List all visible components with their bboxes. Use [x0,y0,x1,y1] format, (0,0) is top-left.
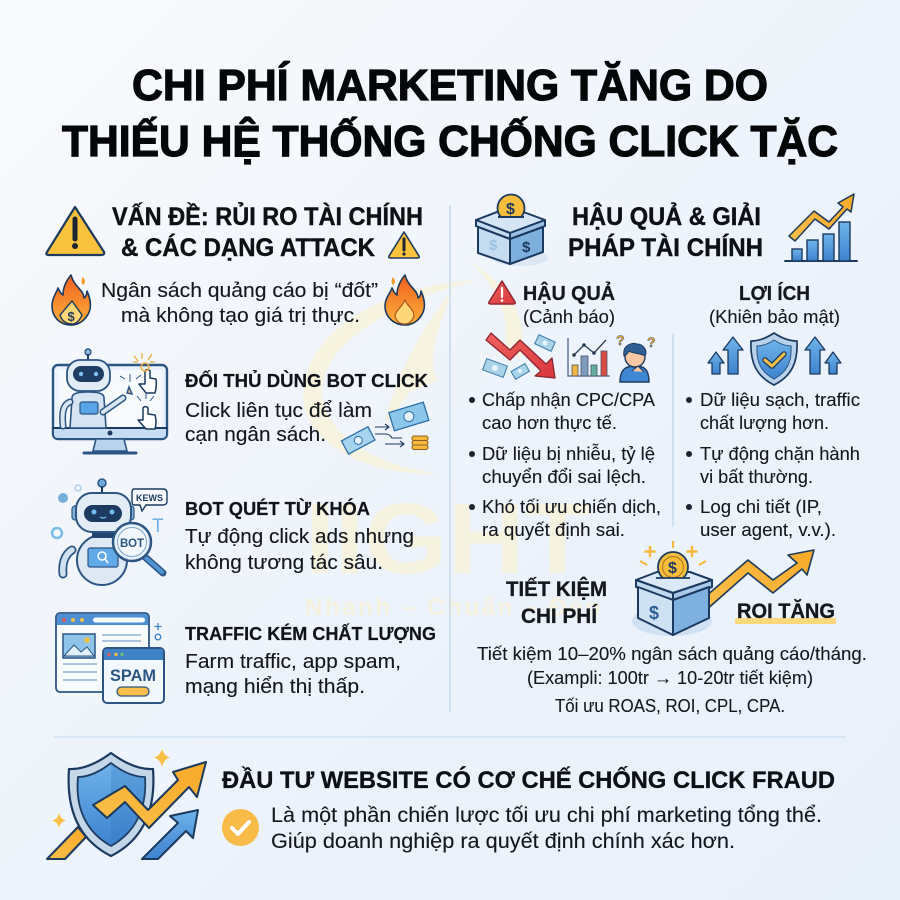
text: invest detail: Giúp doanh nghiệp ra quyết định chính xác hơn. [271,830,735,853]
icon: spam browser windows [56,613,164,703]
icon: savings box with coin: $ [489,237,498,254]
text: savings detail: (Exampli: 100tr → 10-20tr tiết kiệm) [527,667,813,688]
list: consequences: ra quyết định sai. [482,519,625,540]
icon: money draining to coins [341,402,429,454]
text: auto click ads [185,525,414,574]
text: savings detail: Tiết kiệm 10–20% ngân sách quảng cáo/tháng. [477,643,867,664]
text: auto click ads: không tương tác sâu. [185,551,383,574]
icon: savings box with coin: $ [506,201,515,218]
heading: problem: VẤN ĐỀ: RỦI RO TÀI CHÍNH [112,201,423,231]
icon: robot at monitor [53,349,167,453]
list: benefits: chất lượng hơn. [700,412,829,433]
item: keyword bots [52,479,414,585]
heading: problem: & CÁC DẠNG ATTACK [121,233,375,262]
icon: savings box with coin: $ [522,239,531,256]
text: savings detail: Tối ưu ROAS, ROI, CPL, CPA. [555,695,785,716]
heading: benefits: LỢI ÍCH [739,282,810,305]
text: invest detail: Là một phần chiến lược tối ưu chi phí marketing tổng thể. [271,804,822,827]
icon: shield with growth arrows [47,749,206,859]
list: benefits: user agent, v.v.). [700,519,836,540]
text: auto click ads: Tự động click ads nhưng [185,525,414,548]
text: click continuously: cạn ngân sách. [185,423,326,446]
item: low quality traffic [56,613,436,703]
text: click continuously: Click liên tục để làm [185,399,372,422]
heading: benefits [709,282,840,327]
icon: falling money arrow [483,333,555,379]
icon: savings box with rising arrow [632,541,814,636]
heading: consequences: HẬU QUẢ [523,281,615,305]
heading: consequences and solutions [568,201,763,262]
icon: flame with dollar: $ [68,309,76,324]
icon: savings box with rising arrow: $ [649,603,659,623]
heading: low quality traffic: TRAFFIC KÉM CHẤT LƯỢNG [185,623,436,644]
icon: savings box with rising arrow: $ [668,560,677,577]
icon: confused person: ? [647,334,656,350]
heading: cost savings: CHI PHÍ [521,605,598,628]
panel: problem and attack types [46,201,436,703]
text: budget burned [101,279,378,327]
heading: consequences: (Cảnh báo) [523,306,615,327]
panel: bottom call to action [47,749,835,859]
icon: flame [385,275,424,325]
icon: rising bar chart [785,194,857,261]
icon: savings box with coin [476,194,548,266]
list: benefits [686,389,860,540]
list: consequences: Khó tối ưu chiến dịch, [482,496,661,517]
panel: consequences and financial solutions [469,194,867,716]
icon: robot with magnifier: KEWS [136,493,163,504]
icon: check badge [222,809,259,846]
heading: benefits: (Khiên bảo mật) [709,306,840,327]
icon: red warning [489,281,515,304]
list: consequences: cao hơn thực tế. [482,412,617,433]
list: consequences: Dữ liệu bị nhiễu, tỷ lệ [482,443,655,464]
column: consequences [469,281,661,540]
icon: confused person: ? [616,332,625,348]
icon: spam browser windows: SPAM [110,666,156,685]
heading: cost savings: TIẾT KIỆM [506,577,607,601]
list: benefits: vi bất thường. [700,466,813,487]
column: benefits [686,282,860,540]
list: benefits: Tự động chặn hành [700,443,860,464]
title: THIẾU HỆ THỐNG CHỐNG CLICK TẶC [62,115,838,166]
icon: confused person [616,332,656,382]
text: farm traffic [185,650,401,698]
text: budget burned: mà không tạo giá trị thực. [121,304,360,327]
watermark logo [303,262,600,621]
text: invest detail [271,804,822,853]
icon: robot with magnifier [52,479,167,585]
title [62,60,838,166]
heading: keyword bot: BOT QUÉT TỪ KHÓA [185,498,370,519]
text: click continuously [185,399,372,446]
watermark logo: IIGHT [305,483,590,595]
text: savings detail [477,643,867,716]
heading: consequences [523,281,615,327]
text: farm traffic: Farm traffic, app spam, [185,650,401,673]
watermark logo: Nhanh – Chuẩn – Đẹp [305,594,600,621]
icon: mixed chart [568,338,610,376]
item: competitor bots [53,349,429,454]
icon: small warning triangle [389,232,419,258]
heading: consequences and solutions: PHÁP TÀI CHÍNH [568,233,763,262]
list: consequences: Chấp nhận CPC/CPA [482,389,656,410]
heading: problem [112,201,423,262]
text: farm traffic: mạng hiển thị thấp. [185,675,365,698]
heading: cost savings [506,577,607,628]
icon: robot with magnifier: T [152,516,164,537]
text: budget burned: Ngân sách quảng cáo bị “đốt” [101,279,378,302]
icon: robot with magnifier: BOT [120,538,144,550]
label: ROI up: ROI TĂNG [737,600,835,623]
icon: flame with dollar [52,275,90,325]
list: consequences: chuyển đổi sai lệch. [482,466,646,487]
heading: consequences and solutions: HẬU QUẢ & GIẢI [572,201,761,231]
heading: competitor bot click: ĐỐI THỦ DÙNG BOT CLICK [185,370,429,391]
title: CHI PHÍ MARKETING TĂNG DO [132,60,768,110]
list: benefits: Log chi tiết (IP, [700,496,822,517]
icon: shield with up arrows [708,333,841,385]
icon: large warning triangle [46,207,104,255]
heading: invest in anti click fraud: ĐẦU TƯ WEBSITE CÓ CƠ CHẾ CHỐNG CLICK FRAUD [222,766,835,794]
list: consequences [469,389,661,540]
list: benefits: Dữ liệu sạch, traffic [700,389,860,410]
